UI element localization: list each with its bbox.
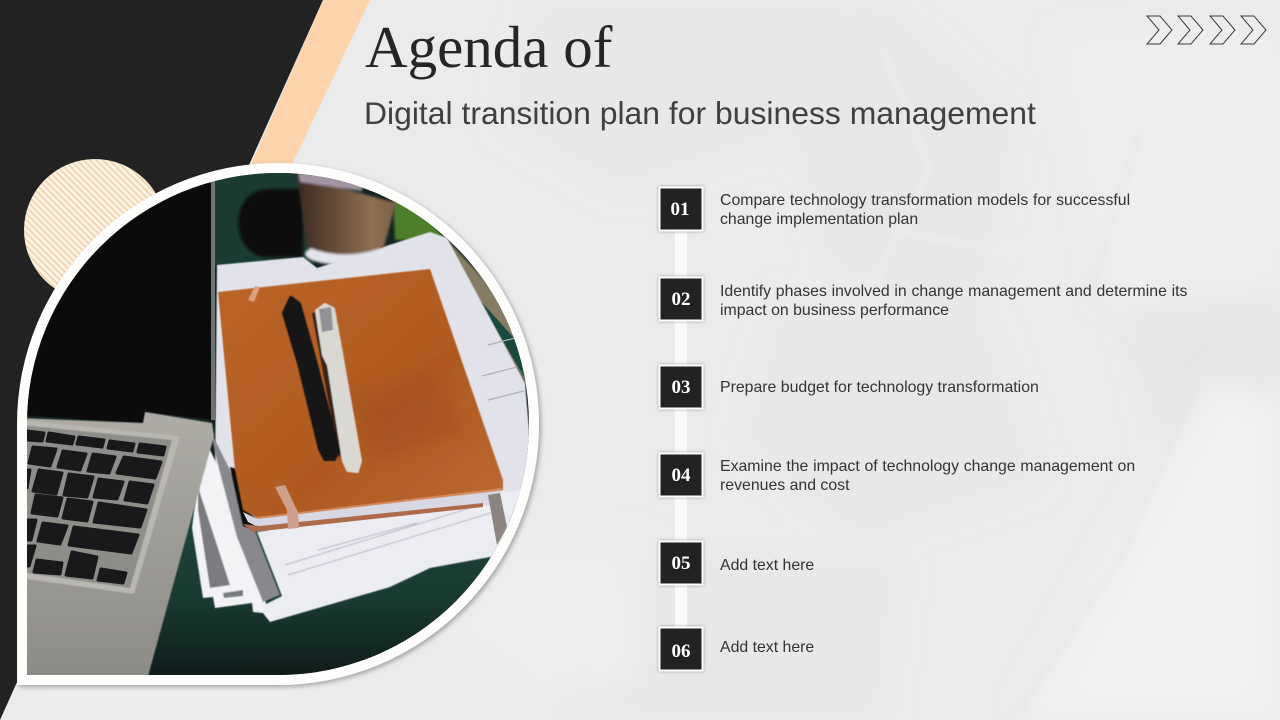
- number badge 06: [660, 628, 702, 670]
- laptop body: [20, 412, 214, 680]
- white frame: [17, 163, 539, 685]
- item 02 text: impact on business performance: [720, 302, 949, 319]
- agenda item 04: [660, 454, 1135, 496]
- paper tabs: [192, 430, 530, 622]
- agenda item 02: [660, 278, 1188, 320]
- chevron arrows: [1147, 16, 1266, 44]
- striped decorative circle: [24, 159, 166, 301]
- item 04 text: revenues and cost: [720, 477, 850, 494]
- number badge 02: [660, 278, 702, 320]
- agenda timeline connector: [675, 225, 687, 630]
- number badge 06: 06: [672, 641, 690, 662]
- agenda item 06: [660, 628, 814, 670]
- item 01 text: change implementation plan: [720, 211, 918, 228]
- papers under notebook: [215, 232, 535, 560]
- item 06 text: Add text here: [720, 639, 814, 656]
- title: Agenda of: [365, 14, 613, 80]
- peach diagonal band: [240, 0, 370, 190]
- agenda item 03: [660, 366, 1039, 408]
- laptop screen: [27, 182, 213, 423]
- elastic strap: [488, 493, 507, 545]
- item 04 text: Examine the impact of technology change management on: [720, 458, 1135, 475]
- number badge 03: [660, 366, 702, 408]
- green plant and background strip: [393, 195, 445, 240]
- dark corner shape: [0, 0, 323, 720]
- keys: [27, 431, 165, 583]
- notebook: [218, 269, 503, 532]
- agenda item 01: [660, 188, 1130, 230]
- keyboard well: [20, 420, 180, 594]
- number badge 05: [660, 542, 702, 584]
- photo: [20, 165, 540, 680]
- number badge 01: 01: [670, 199, 690, 220]
- item 03 text: Prepare budget for technology transformation: [720, 379, 1039, 396]
- item 05 text: Add text here: [720, 557, 814, 574]
- subtitle: Digital transition plan for business management: [364, 95, 1036, 131]
- agenda item 05: [660, 542, 814, 584]
- number badge 03: 03: [672, 377, 690, 398]
- number badge 04: 04: [672, 465, 691, 486]
- number badge 05: 05: [672, 553, 690, 574]
- number badge 02: 02: [672, 289, 690, 310]
- photo frame with laptop and notebook: [17, 163, 540, 685]
- coffee cup: [297, 172, 396, 265]
- item 01 text: Compare technology transformation models for successful: [720, 192, 1130, 209]
- pens: [284, 298, 360, 471]
- item 02 text: Identify phases involved in change management and determine its: [720, 283, 1188, 300]
- number badge 01: [660, 188, 702, 230]
- table and dark cup shadow: [214, 172, 314, 267]
- number badge 04: [660, 454, 702, 496]
